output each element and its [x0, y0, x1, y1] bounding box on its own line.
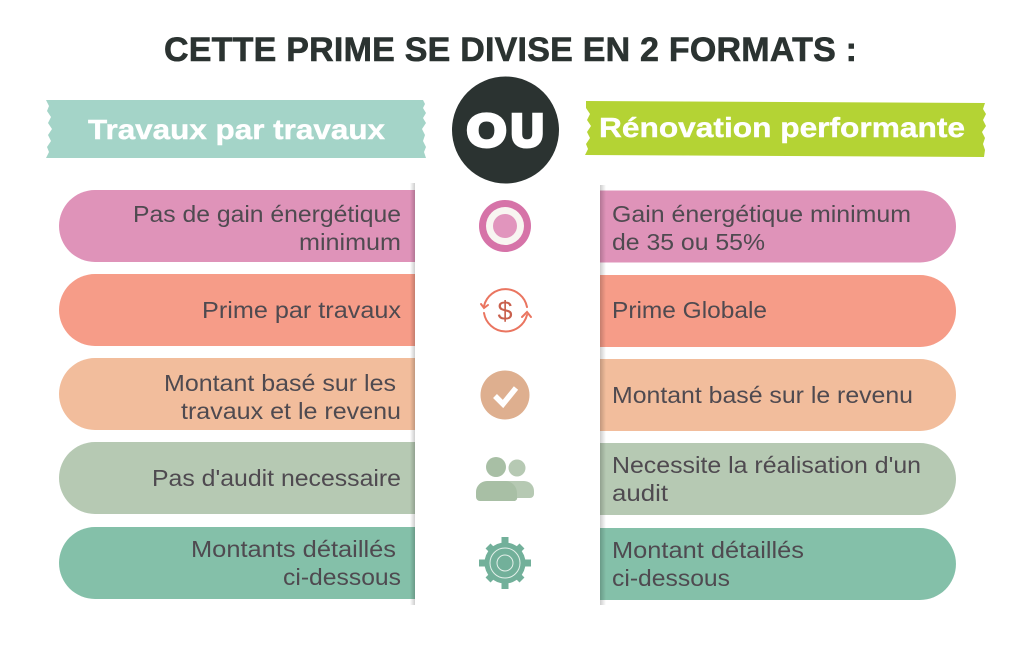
left row 4 — [59, 442, 415, 514]
icon: dollar cycle: $ — [497, 296, 513, 326]
icon: check badge — [480, 370, 530, 420]
left row 3: travaux et le revenu — [181, 398, 401, 424]
ribbon: Travaux par travaux — [46, 100, 426, 158]
left row 1 — [59, 190, 415, 262]
left row 5: ci-dessous — [283, 564, 401, 590]
right row 2: Prime Globale — [612, 297, 767, 323]
left row 2 — [59, 274, 415, 346]
left row 5: Montants détaillés — [191, 536, 396, 562]
title: CETTE PRIME SE DIVISE EN 2 FORMATS : — [164, 31, 857, 69]
ribbon: Rénovation performante — [585, 101, 986, 157]
icon: dollar cycle — [481, 289, 531, 331]
badge: OU: U — [511, 105, 544, 156]
right row 1 — [600, 190, 956, 262]
left row 1: minimum — [299, 229, 401, 255]
right row 1: de 35 ou 55% — [612, 229, 765, 255]
ribbon: Rénovation performante: Rénovation performante — [599, 112, 965, 143]
left row 4: Pas d'audit necessaire — [152, 465, 401, 491]
left row 5 — [59, 527, 415, 599]
right row 4 — [600, 443, 956, 515]
right row 3: Montant basé sur le revenu — [612, 382, 913, 408]
left row 3 — [59, 358, 415, 430]
ribbon: Travaux par travaux: Travaux par travaux — [88, 114, 385, 145]
right column shadow — [600, 185, 606, 605]
right row 5: ci-dessous — [612, 565, 730, 591]
badge: OU — [452, 76, 559, 184]
right row 5 — [600, 528, 956, 600]
icon: gear — [479, 537, 531, 589]
left column shadow — [410, 183, 415, 605]
right row 5: Montant détaillés — [612, 537, 804, 563]
left row 3: Montant basé sur les — [164, 370, 396, 396]
badge: OU: O — [467, 106, 506, 156]
right row 2 — [600, 275, 956, 347]
left row 1: Pas de gain énergétique — [133, 201, 401, 227]
right row 1: Gain énergétique minimum — [612, 201, 911, 227]
right row 4: audit — [612, 480, 669, 506]
left row 2: Prime par travaux — [202, 297, 402, 323]
icon: target — [479, 200, 531, 252]
right row 4: Necessite la réalisation d'un — [612, 452, 921, 478]
icon: people — [476, 457, 534, 501]
right row 3 — [600, 359, 956, 431]
